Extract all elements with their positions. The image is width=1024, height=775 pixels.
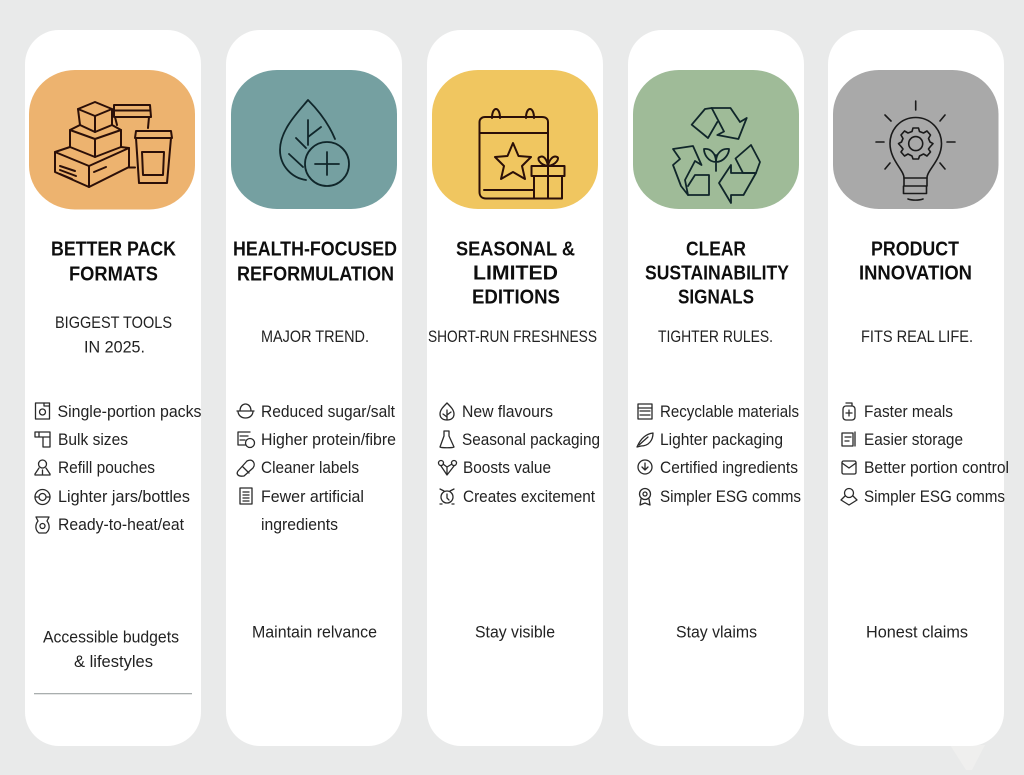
list: Reduced sugar/salt — [261, 402, 395, 421]
list: Single-portion packs — [58, 402, 202, 421]
takeaway: Honest claims — [866, 622, 968, 642]
list: Cleaner labels — [261, 458, 359, 477]
heading: LIMITED — [473, 262, 558, 284]
takeaway: & lifestyles — [74, 652, 153, 671]
panel: clear sustainability signals — [628, 30, 804, 746]
icon tile: leaf drop with plus — [231, 70, 397, 209]
heading — [645, 238, 789, 308]
heading: CLEAR — [686, 238, 746, 260]
takeaway: Stay vlaims — [676, 622, 757, 642]
list: Lighter packaging — [660, 430, 783, 449]
list: Seasonal packaging — [462, 430, 600, 449]
subheading — [55, 313, 172, 356]
list: Lighter jars/bottles — [58, 487, 190, 506]
list: Recyclable materials — [660, 402, 799, 421]
takeaway: Stay visible — [475, 622, 555, 642]
list: Ready-to-heat/eat — [58, 515, 184, 534]
list: Boosts value — [463, 458, 551, 477]
heading: FORMATS — [69, 262, 158, 286]
subheading: BIGGEST TOOLS — [55, 313, 172, 332]
heading: SIGNALS — [678, 286, 754, 308]
list — [438, 402, 600, 506]
list — [35, 402, 202, 534]
subheading: IN 2025. — [84, 338, 145, 356]
subheading: SHORT-RUN FRESHNESS — [428, 327, 597, 346]
panel: product innovation — [828, 30, 1009, 746]
takeaway: Maintain relvance — [252, 622, 377, 642]
heading: PRODUCT — [871, 238, 959, 260]
heading: SUSTAINABILITY — [645, 262, 789, 284]
subheading: FITS REAL LIFE. — [861, 327, 973, 346]
heading — [51, 238, 176, 286]
panel: health-focused reformulation — [226, 30, 402, 746]
subheading: TIGHTER RULES. — [658, 327, 773, 346]
icon tile: calendar star and gift — [432, 70, 598, 209]
list: Simpler ESG comms — [660, 487, 801, 506]
icon tile: boxes and cups — [29, 70, 195, 210]
panel: better pack formats — [25, 30, 202, 746]
list: Easier storage — [864, 430, 963, 449]
heading — [233, 238, 397, 286]
heading: BETTER PACK — [51, 238, 176, 260]
list: Faster meals — [864, 402, 953, 421]
subheading: MAJOR TREND. — [261, 327, 369, 346]
list — [841, 402, 1009, 506]
list — [237, 402, 396, 534]
icon tile: light bulb with gear — [833, 70, 998, 209]
list — [637, 402, 801, 506]
list: Refill pouches — [58, 458, 155, 477]
panel: seasonal and limited editions — [427, 30, 603, 746]
takeaway — [43, 628, 179, 671]
list: Certified ingredients — [660, 458, 798, 477]
heading: HEALTH-FOCUSED — [233, 238, 397, 260]
list: Creates excitement — [463, 487, 595, 506]
heading: INNOVATION — [859, 262, 972, 284]
icon tile: recycling arrows and sprout — [633, 70, 799, 209]
list: ingredients — [261, 515, 338, 534]
takeaway: Accessible budgets — [43, 628, 179, 646]
heading: EDITIONS — [472, 286, 560, 308]
heading — [859, 238, 972, 284]
list: Higher protein/fibre — [261, 430, 396, 449]
list: Better portion control — [864, 458, 1009, 477]
heading: REFORMULATION — [237, 262, 394, 286]
list: Simpler ESG comms — [864, 487, 1005, 506]
heading: SEASONAL & — [456, 238, 575, 260]
list: Fewer artificial — [261, 487, 364, 506]
list: New flavours — [462, 402, 553, 421]
list: Bulk sizes — [58, 430, 128, 449]
heading — [456, 238, 575, 308]
